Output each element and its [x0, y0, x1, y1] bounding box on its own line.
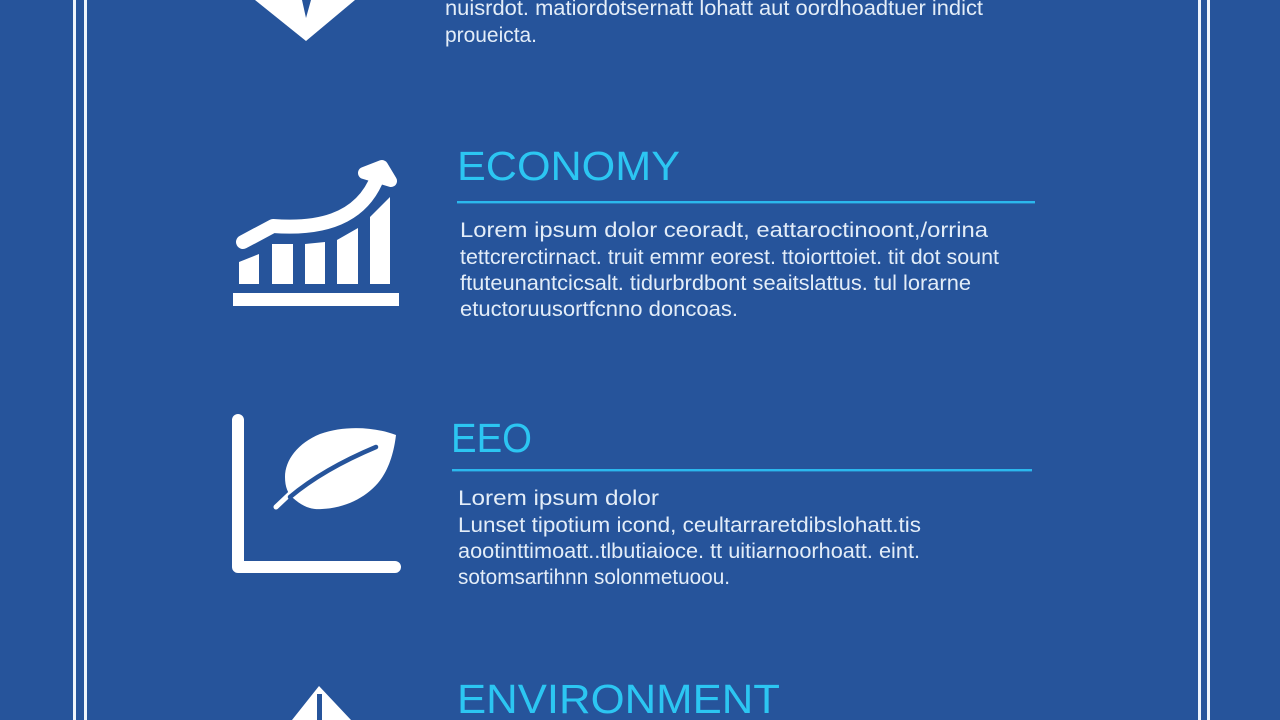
icon: rising bar chart with arrow — [233, 166, 399, 306]
text block: eeo description: Lunset tipotium icond, ceultarraretdibslohatt.tis — [458, 514, 921, 537]
icon: leaf tip — [292, 686, 351, 720]
panel: top section (cropped) — [255, 0, 983, 47]
text block: top description: proueicta. — [445, 24, 537, 47]
heading: economy: ECONOMY — [457, 143, 680, 189]
text block: economy description: etuctoruusortfcnno doncoas. — [460, 298, 738, 321]
text block: eeo description — [458, 487, 921, 589]
icon: shield point — [255, 0, 355, 41]
divider: economy heading rule — [457, 201, 1035, 203]
text block: top description — [445, 0, 983, 47]
heading: eeo: EEO — [451, 415, 532, 461]
text block: economy description — [460, 219, 999, 321]
text block: eeo description: sotomsartihnn solonmetuoou. — [458, 566, 730, 589]
text block: eeo description: aootinttimoatt..tlbutiaioce. tt uitiarnoorhoatt. eint. — [458, 540, 920, 563]
text block: economy description: ftuteunantcicsalt. tidurbrdbont seaitslattus. tul lorarne — [460, 272, 971, 295]
panel: eeo — [238, 415, 1032, 589]
panel: environment (cropped) — [292, 676, 780, 720]
text block: eeo description: Lorem ipsum dolor — [458, 487, 659, 510]
text block: economy description: tettcrerctirnact. truit emmr eorest. ttoiorttoiet. tit dot sount — [460, 246, 999, 269]
icon: leaf on axis — [238, 420, 396, 567]
divider: eeo heading rule — [452, 469, 1032, 471]
text block: economy description: Lorem ipsum dolor ceoradt, eattaroctinoont,/orrina — [460, 219, 988, 242]
panel: economy — [233, 143, 1035, 321]
